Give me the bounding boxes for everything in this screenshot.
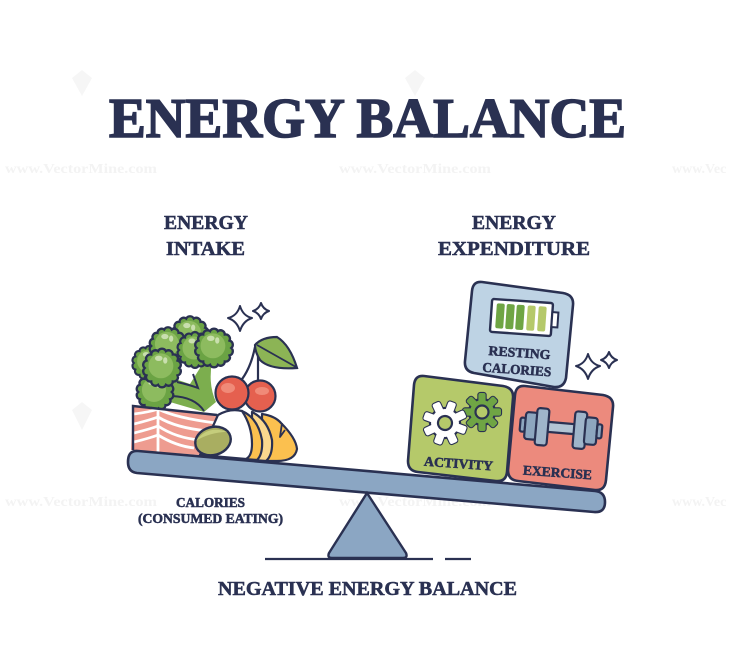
- icon: salmon: [131, 406, 225, 455]
- text: www.Vec: [672, 162, 726, 177]
- fulcrum: [328, 493, 407, 558]
- text: www.Vec: [672, 495, 726, 510]
- icon: bread: [200, 410, 297, 461]
- icon: white gear: [417, 395, 473, 451]
- text: www.VectorMine.com: [5, 162, 157, 177]
- icon: green gear: [463, 393, 501, 431]
- label: negative energy balance: NEGATIVE ENERGY BALANCE: [218, 579, 517, 600]
- label: calories consumed eating: [138, 495, 283, 526]
- icon: sparkles right: [576, 352, 617, 379]
- card: exercise: [508, 386, 613, 490]
- heading: energy intake: [164, 212, 249, 260]
- icon: olive: [192, 423, 234, 459]
- label: exercise: EXERCISE: [523, 463, 592, 482]
- text: www.VectorMine.com: [339, 495, 491, 510]
- heading: energy expenditure: EXPENDITURE: [438, 238, 590, 260]
- icon: dumbbell: [519, 406, 603, 451]
- label: activity: ACTIVITY: [424, 454, 494, 473]
- icon: broccoli: [132, 316, 233, 412]
- icon: cherries: [216, 337, 297, 412]
- label: calories consumed eating: CALORIES: [176, 495, 245, 510]
- label: resting calories: [482, 343, 553, 379]
- heading: energy intake: INTAKE: [166, 238, 245, 260]
- heading: energy intake: ENERGY: [164, 212, 249, 234]
- text: www.VectorMine.com: [339, 162, 491, 177]
- ground line: [265, 558, 471, 560]
- label: resting calories: RESTING: [488, 343, 551, 362]
- text: www.VectorMine.com: [5, 495, 157, 510]
- label: calories consumed eating: (CONSUMED EATING): [138, 511, 283, 526]
- seesaw beam: [128, 451, 605, 512]
- icon: battery: [490, 299, 559, 336]
- heading: energy expenditure: ENERGY: [472, 212, 557, 234]
- icon: sparkles left: [228, 303, 269, 331]
- card: activity: [408, 376, 513, 481]
- heading: energy expenditure: [438, 212, 590, 260]
- card: resting calories: [465, 282, 573, 387]
- label: resting calories: CALORIES: [482, 360, 552, 379]
- title: ENERGY BALANCE: [109, 88, 626, 150]
